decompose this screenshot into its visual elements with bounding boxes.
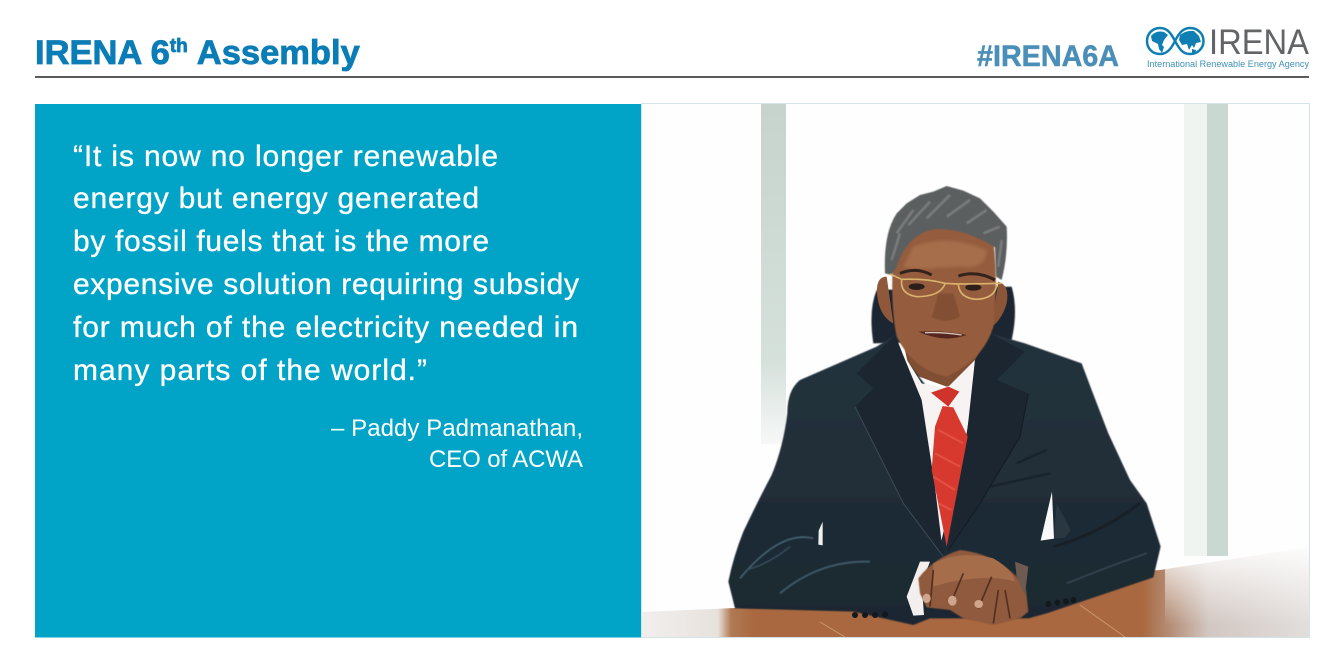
head (877, 186, 1007, 377)
glasses (890, 274, 1002, 299)
suit (728, 333, 1161, 625)
sleeve folds (740, 450, 1147, 593)
panel background (35, 104, 641, 638)
logo wordmark: IRENA (1209, 23, 1310, 62)
eyebrows (900, 270, 995, 280)
logo tagline: International Renewable Energy Agency (1147, 59, 1310, 69)
window frame right (1184, 104, 1228, 556)
shirt (902, 352, 975, 547)
icon: twin globes (1147, 28, 1204, 54)
photo border (642, 104, 1310, 638)
attribution: – Paddy Padmanathan, (331, 415, 583, 442)
table (641, 547, 1309, 637)
quote text: for much of the electricity needed in (73, 311, 578, 344)
quote text: by fossil fuels that is the more (73, 225, 489, 258)
title: Assembly (197, 34, 360, 72)
photo background window (641, 104, 1309, 637)
eyes (909, 283, 925, 290)
wrist watch (1015, 562, 1028, 595)
portrait of the speaker (728, 186, 1161, 625)
chair (871, 287, 1015, 343)
shirt cuff (907, 562, 930, 616)
quote text (73, 140, 579, 387)
hair (885, 186, 1007, 280)
neck (904, 348, 981, 387)
IRENA logo (1147, 23, 1310, 69)
quote text: “It is now no longer renewable (73, 140, 498, 173)
panel: portrait photo (641, 104, 1309, 637)
gaps between arms and torso (1041, 492, 1054, 541)
mouth (918, 331, 967, 338)
window frame left (761, 104, 786, 444)
face (892, 225, 996, 377)
hashtag: #IRENA6A (977, 40, 1119, 73)
quote text: expensive solution requiring subsidy (73, 268, 579, 301)
sleeve buttons (852, 597, 1076, 618)
panel: quote (35, 104, 641, 638)
header rule (35, 76, 1309, 78)
nose (932, 293, 960, 321)
quote text: many parts of the world.” (73, 354, 427, 387)
attribution: CEO of ACWA (429, 446, 583, 473)
quote text: energy but energy generated (73, 182, 479, 215)
attribution (331, 415, 583, 473)
title: th (170, 36, 188, 57)
hands (918, 550, 1028, 625)
lapels (855, 335, 943, 557)
ears (877, 277, 893, 323)
tie (931, 387, 968, 547)
title: IRENA 6 (35, 34, 170, 72)
